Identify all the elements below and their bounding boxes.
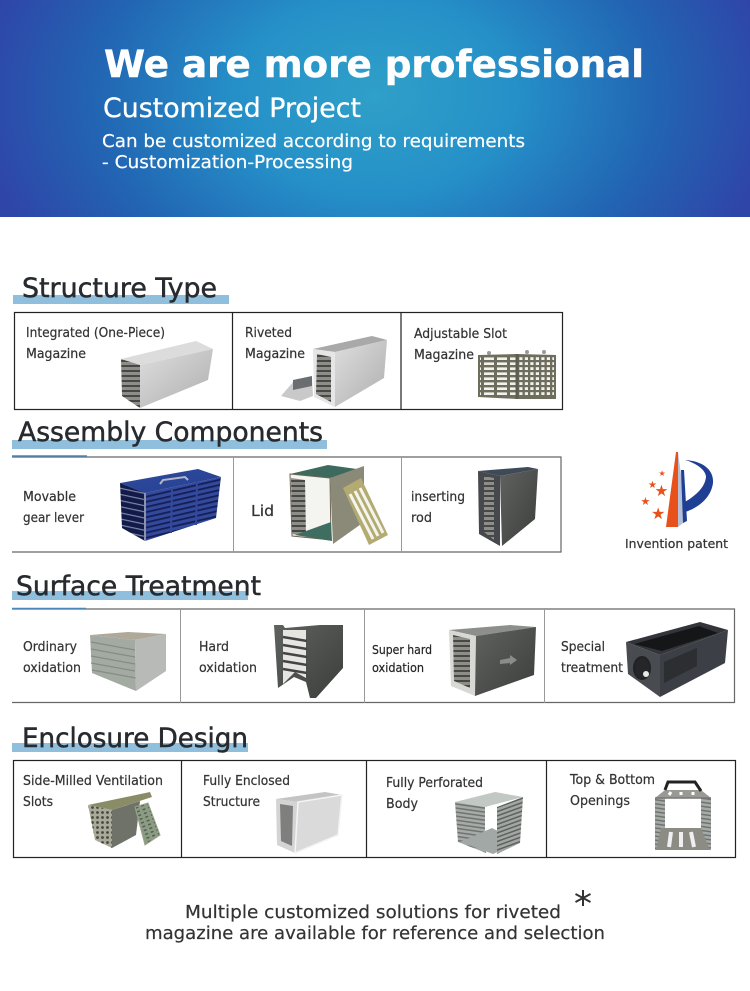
item: side-milled ventilation slots [23,774,163,848]
item: movable gear lever: Movable [23,490,76,505]
item: fully perforated body: Fully Perforated [386,776,483,791]
description [102,131,525,173]
item: side-milled ventilation slots: Side-Milled Ventilation [23,774,163,789]
footer note: Multiple customized solutions for riveted [185,902,561,923]
item: top and bottom openings [569,773,711,850]
icon: invention patent logo [625,452,728,551]
item: fully perforated body: Body [386,797,418,812]
item: integrated magazine [26,326,213,408]
item: ordinary oxidation: Ordinary [23,640,77,655]
item: special treatment: treatment [561,661,623,676]
item: adjustable slot magazine: Adjustable Slot [414,327,507,342]
panel: surface treatment [12,608,734,703]
item: lid [251,465,388,545]
heading: Enclosure Design: Enclosure Design [22,723,248,754]
item: side-milled ventilation slots: Slots [23,795,53,810]
section: Surface Treatment [12,571,734,703]
panel: structure types [14,312,562,410]
heading: Surface Treatment: Surface Treatment [16,571,261,602]
icon: invention patent logo: ★ [654,482,668,500]
item: hard oxidation [199,625,343,698]
item: super hard oxidation: oxidation [372,661,424,675]
item: integrated magazine: Integrated (One-Piece) [26,326,165,341]
item: fully enclosed structure: Structure [203,795,260,810]
item: inserting rod: inserting [411,490,465,505]
footer note [145,890,605,944]
item: fully perforated body [386,776,523,854]
item: adjustable slot magazine: Magazine [414,348,474,363]
item: movable gear lever: gear lever [23,511,85,526]
item: super hard oxidation: Super hard [372,643,432,657]
subtitle: Customized Project [103,93,361,124]
item: special treatment [561,622,728,697]
item: riveted magazine [245,326,387,407]
item: fully enclosed structure [203,774,342,853]
item: super hard oxidation [372,625,536,696]
section: Enclosure Design [12,723,736,858]
item: adjustable slot magazine [414,327,555,399]
main title: We are more professional [104,43,644,86]
description: Can be customized according to requirements [102,131,525,152]
item: ordinary oxidation: oxidation [23,661,81,676]
item: hard oxidation: Hard [199,640,229,655]
heading: Structure Type: Structure Type [22,273,217,304]
item: lid: Lid [251,502,274,520]
footer note: magazine are available for reference and selection [145,923,605,944]
item: riveted magazine: Magazine [245,347,305,362]
description: - Customization-Processing [102,152,353,173]
icon: asterisk [576,890,590,906]
icon: invention patent logo: ★ [651,504,665,523]
icon: invention patent logo: ★ [648,480,657,491]
item: inserting rod [411,467,538,546]
item: riveted magazine: Riveted [245,326,292,341]
panel: enclosure design [14,760,736,858]
item: movable gear lever [23,469,221,541]
icon: invention patent logo: ★ [640,495,650,508]
item: inserting rod: rod [411,511,432,526]
section: Structure Type [13,273,562,410]
item: top and bottom openings: Openings [570,794,630,809]
item: top and bottom openings: Top & Bottom [569,773,655,788]
panel: assembly components [12,456,561,552]
heading: Assembly Components: Assembly Components [18,417,323,448]
item: hard oxidation: oxidation [199,661,257,676]
section: Assembly Components [12,417,561,552]
item: special treatment: Special [561,640,605,655]
icon: invention patent logo: ★ [658,469,666,478]
header banner [0,0,750,217]
item: integrated magazine: Magazine [26,347,86,362]
item: ordinary oxidation [23,632,166,691]
item: fully enclosed structure: Fully Enclosed [203,774,290,789]
label: invention patent: Invention patent [625,536,728,551]
